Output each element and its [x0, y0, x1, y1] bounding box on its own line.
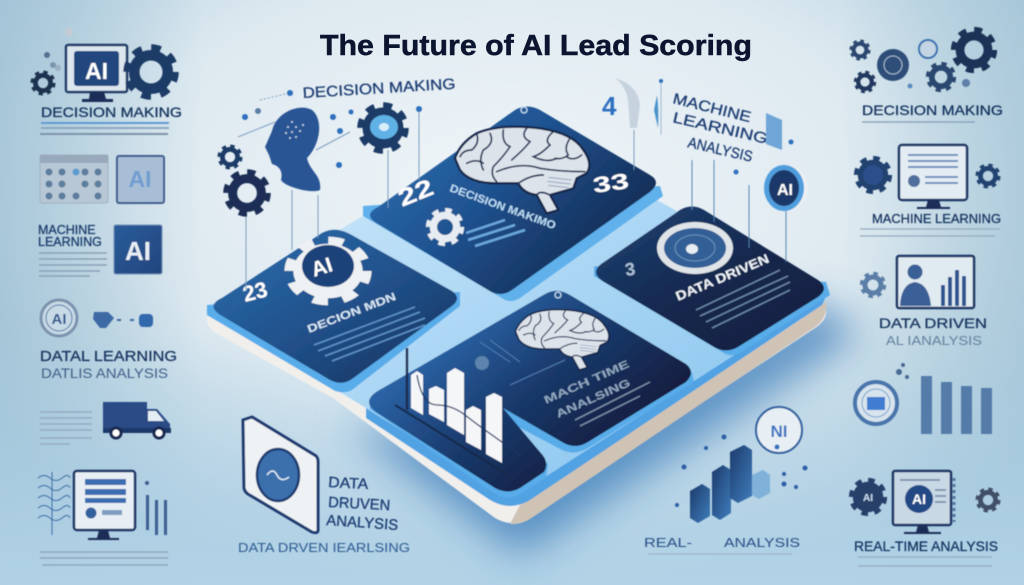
icon: waves: [38, 472, 70, 535]
heading: decision making centre: DECISION MAKING: [302, 76, 456, 102]
heading: decision making: DECISION MAKING: [41, 104, 182, 120]
icon: AI gear right: AI: [863, 493, 873, 504]
heading: machine learning analysis: [671, 90, 769, 166]
card: data driven: [594, 206, 830, 355]
icon: AI box light: AI: [128, 166, 152, 192]
icon: report monitor: [899, 145, 967, 209]
heading: data analysis: DATLIS ANALYSIS: [41, 365, 168, 381]
subheading: ai analysis: AL IANALYSIS: [886, 334, 982, 348]
number 22: 22: [394, 174, 438, 213]
icon: disc: [657, 222, 733, 274]
heading: machine learning right: MACHINE LEARNING: [872, 212, 1001, 226]
heading: data driven right: DATA DRIVEN: [879, 315, 987, 331]
ring marker: [521, 107, 527, 113]
icon: gear lens: [362, 107, 404, 149]
heading: data driven analysis: ANALYSIS: [326, 512, 399, 534]
label: data driven learning: DATA DRVEN IEARLSING: [238, 540, 410, 555]
heading: data driven analysis: DRUVEN: [328, 494, 391, 514]
text block: lower lines: [40, 552, 168, 565]
icon: AI monitor right: [893, 471, 954, 534]
icon: gear cluster: [851, 31, 993, 91]
icon: number 4 mark: [602, 78, 663, 170]
heading: machine learning analysis: LEARNING: [671, 109, 769, 148]
card label: MACH TIME: [542, 358, 631, 407]
brain: [455, 127, 589, 213]
icon: side bars: [145, 481, 167, 535]
heading: decision making right: DECISION MAKING: [862, 102, 1003, 118]
icon: AI gear right: [852, 481, 998, 513]
pins and dots: [238, 90, 422, 290]
heading: data driven analysis: [326, 474, 399, 534]
icon: AI ring: [41, 300, 77, 336]
icon: AI monitor with gears: [33, 28, 174, 102]
icon: small gear: [862, 274, 884, 296]
text lines: [314, 307, 425, 361]
card label: ANALSING: [554, 377, 632, 421]
ring marker: [555, 292, 561, 298]
card label: DECION MDN: [306, 291, 398, 336]
icon: AI monitor with gears: AI: [85, 58, 108, 84]
text lines: [858, 557, 992, 566]
icon: AI box dark: [114, 225, 162, 274]
platform top: [208, 125, 830, 504]
text lines: [696, 270, 790, 328]
icon: document strip: [692, 113, 794, 262]
heading: real-time analysis: REAL-TIME ANALYSIS: [854, 538, 998, 554]
card label: DATA DRIVEN: [673, 251, 771, 304]
icon: ring with dots: [855, 363, 909, 424]
card label: [542, 358, 632, 421]
icon: small gear: [429, 211, 461, 243]
panel: left column: [33, 28, 182, 565]
bar chart: grey blue columns: [921, 376, 992, 434]
text lines: [575, 382, 650, 426]
icon: control panel: [40, 155, 108, 203]
icon: person chart monitor: [897, 256, 974, 308]
icon: AI gear: AI: [308, 253, 336, 282]
icon: number 4 mark: 4: [602, 91, 617, 121]
chart ghost lines: [480, 340, 565, 385]
brain small: [515, 310, 609, 370]
number 23: 23: [240, 277, 270, 307]
panel: floating icons centre: [220, 76, 808, 555]
text lines: [860, 229, 1000, 236]
text block: truck lines: [40, 412, 92, 444]
icon: AI gear: [292, 242, 364, 300]
card: decision making: [363, 106, 663, 301]
heading: machine learning analysis: MACHINE: [671, 90, 753, 126]
icon: document monitor: [74, 471, 135, 540]
text block: machine lines: [39, 253, 107, 276]
panel: right column: [851, 31, 1003, 566]
platform base: [207, 305, 826, 523]
icon: AI box light: [117, 156, 164, 203]
icon: gear small: [220, 147, 240, 167]
heading: machine learning: MACHINE: [38, 223, 96, 237]
heading: machine learning analysis: ANALYSIS: [686, 134, 754, 166]
icon: head silhouette: [265, 108, 320, 191]
panel: platform: [207, 106, 830, 524]
platform shadow: [345, 300, 860, 555]
text block: decision lines: [40, 123, 169, 134]
heading: data learning analysis: DATAL LEARNING: [40, 348, 177, 365]
chart stripes: [466, 220, 525, 246]
card: real time and chart: [369, 291, 694, 498]
icon: connected shapes: [93, 312, 153, 328]
icon: AI ring: AI: [52, 311, 66, 328]
label: real: REAL-: [644, 535, 692, 550]
icon: truck: [103, 402, 171, 438]
card: decision left: [207, 230, 460, 392]
bar chart: white columns: [395, 348, 520, 475]
text line: [648, 553, 792, 555]
icon: tablet with dial: [243, 417, 318, 533]
card label: DECISION MAKIMO: [448, 183, 558, 232]
icon: monitor gears: [857, 159, 998, 191]
text line: [862, 121, 975, 123]
heading: data driven analysis: DATA: [328, 474, 369, 493]
icon: NI badge: [756, 407, 802, 453]
icon: AI coin: AI: [777, 182, 793, 199]
bar chart: 3d blue: [690, 445, 770, 523]
number 33: 33: [591, 168, 630, 198]
icon: NI badge: NI: [770, 422, 788, 441]
small gear detail: [475, 356, 489, 370]
number 3: 3: [624, 259, 636, 280]
title: The Future of AI Lead Scoring: [320, 30, 752, 62]
icon: AI monitor right: AI: [912, 491, 926, 507]
heading: machine learning: LEARNING: [38, 235, 102, 249]
icon: AI box dark: AI: [125, 236, 151, 266]
scatter dots: [675, 434, 808, 507]
icon: AI coin: [764, 165, 808, 211]
label: analysis: ANALYSIS: [724, 535, 800, 550]
icon: gear large: [227, 173, 267, 213]
